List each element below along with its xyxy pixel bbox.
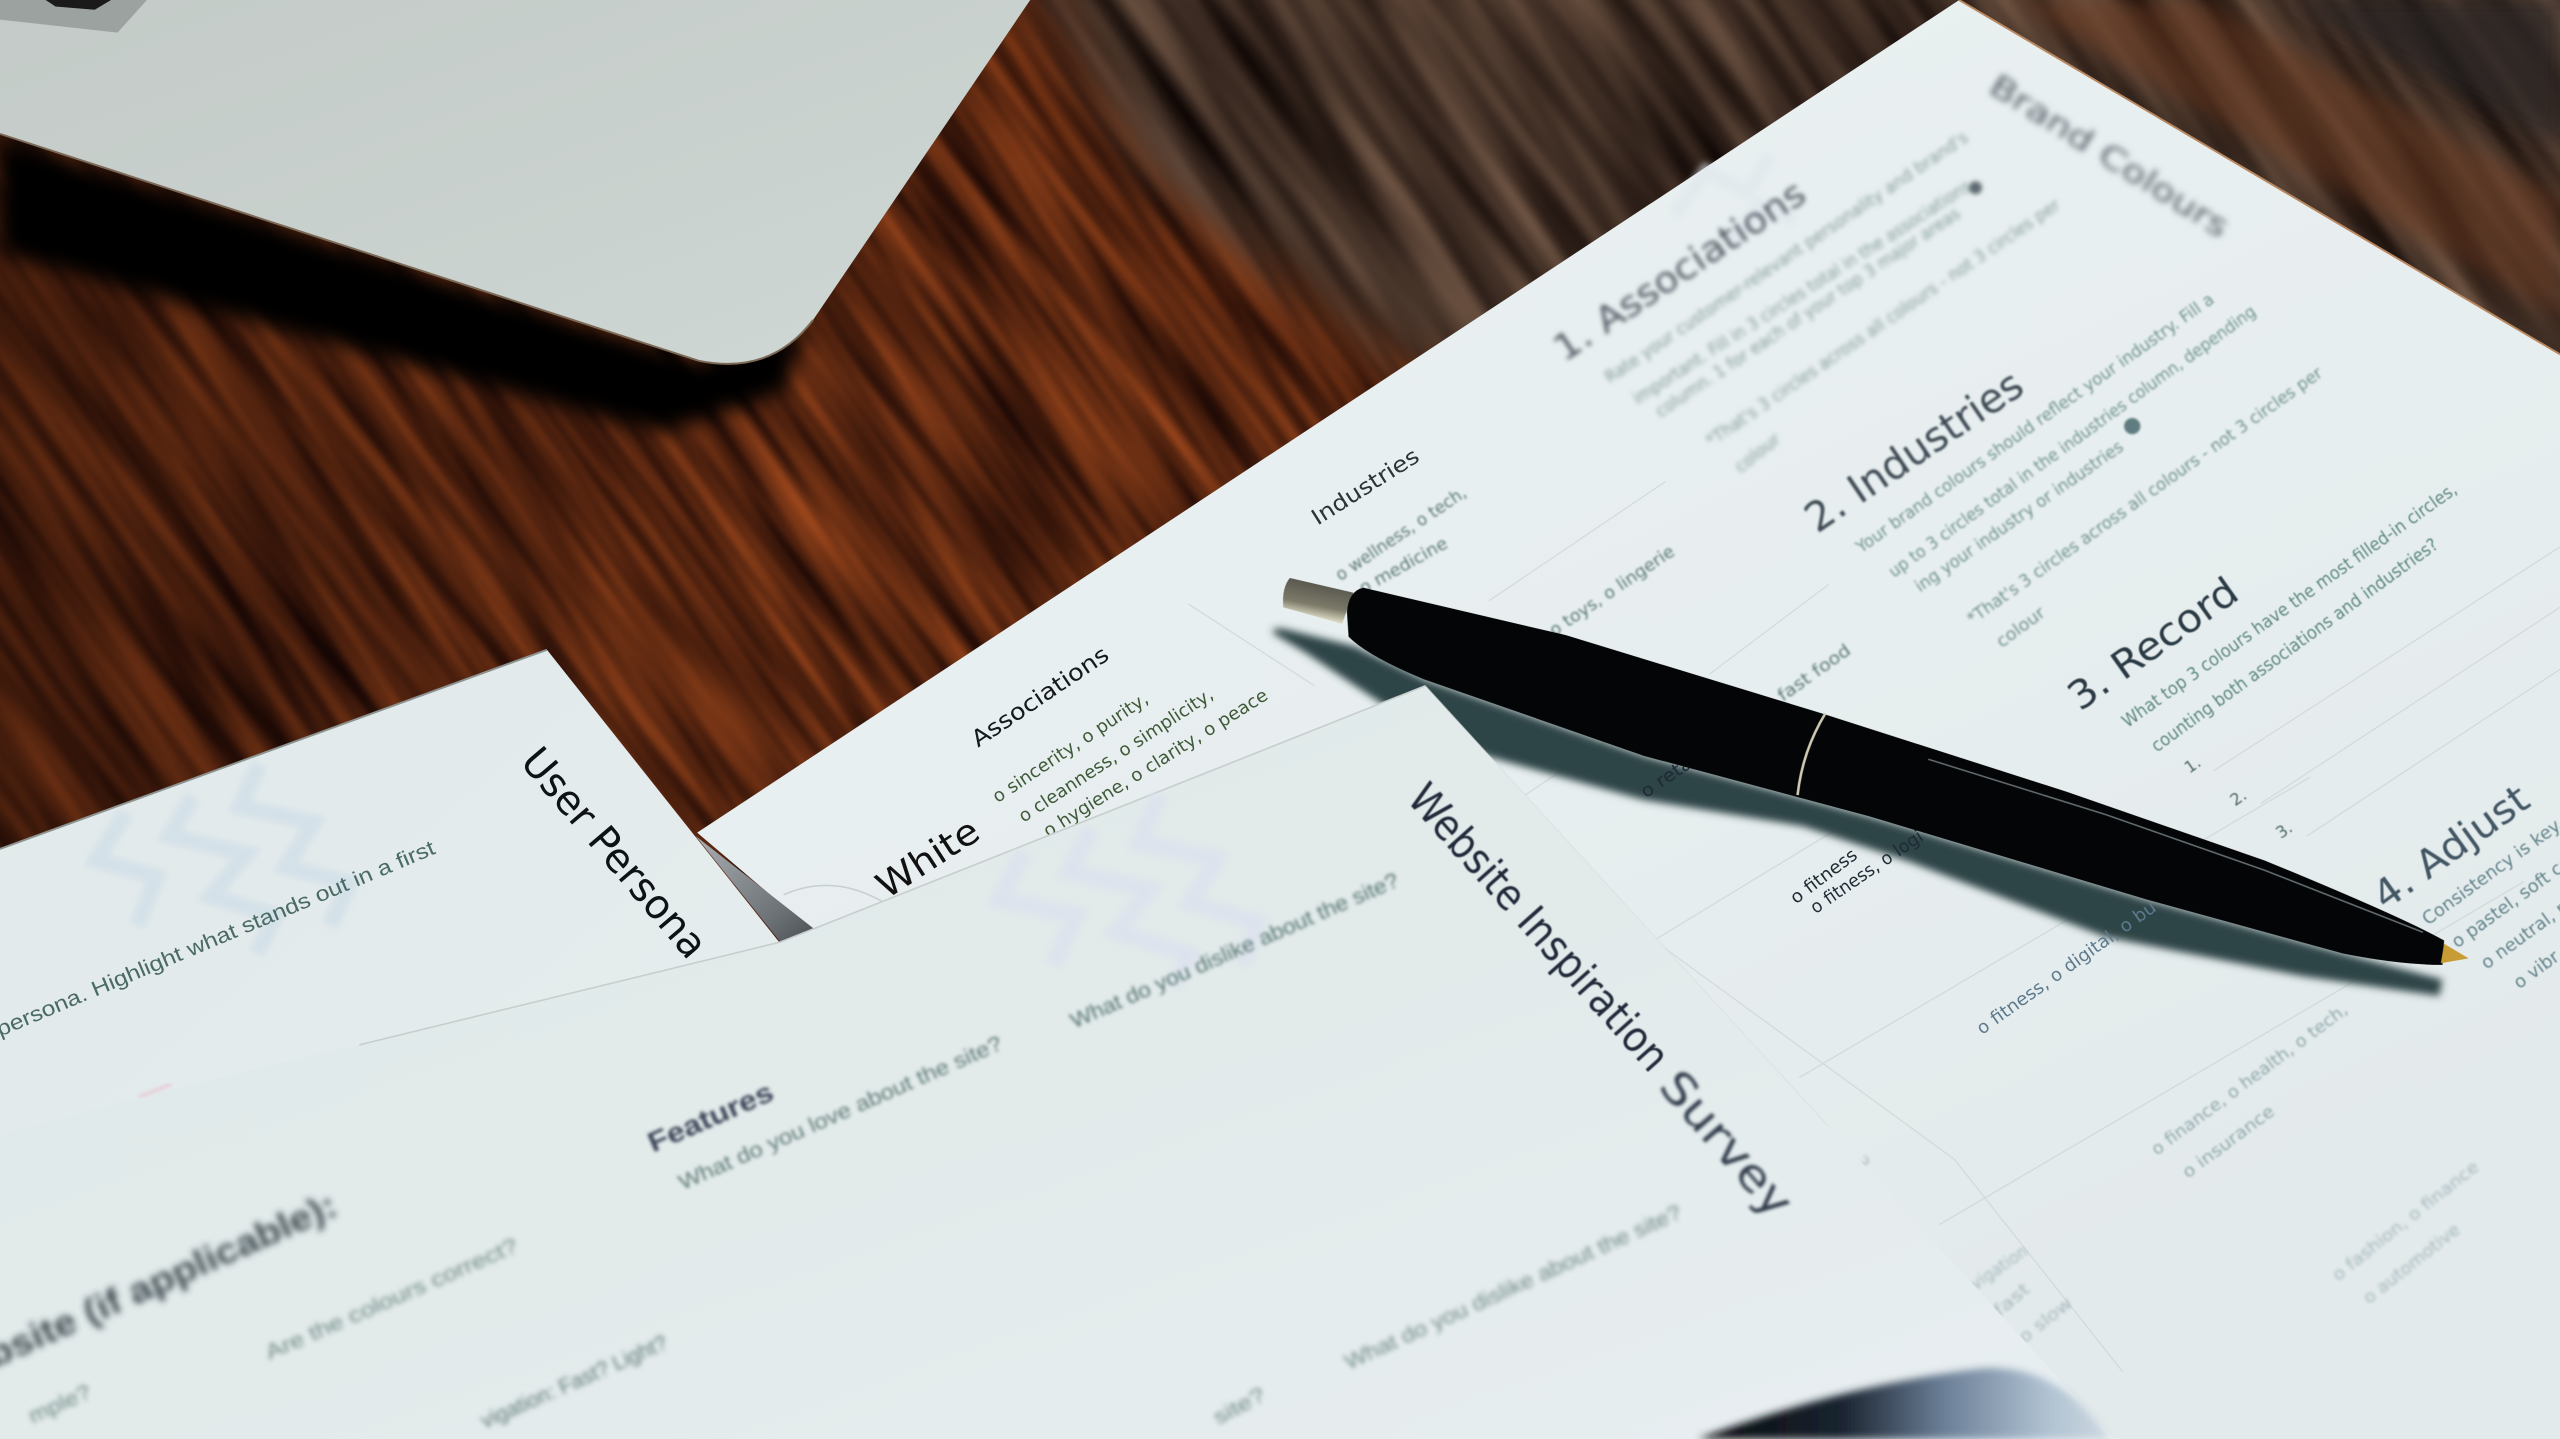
heading: Website Inspiration Survey [1398, 775, 1803, 1228]
panel: User Persona worksheet [0, 650, 780, 1306]
table: industries column: o fashion, o finance [2329, 1157, 2483, 1286]
text block: 1. Associations: 1. Associations [1546, 173, 1814, 370]
text block: 2. Industries: ing your industry or industries [1911, 437, 2128, 597]
text block: 3. Record: 3. [2272, 818, 2296, 842]
panel: Brand Colours worksheet [697, 0, 2560, 1439]
laptop hinge detail [0, 0, 147, 33]
text block: 1. Associations: *That's 3 circles across all colours - not 3 circles per [1703, 195, 2065, 451]
text block: 1. Associations [1546, 128, 2065, 477]
table: colour associations: o sincerity, o purity, [989, 688, 1152, 807]
heading: User Persona [512, 738, 717, 968]
table: industries column: o fitness, o logi [1806, 826, 1927, 918]
text block: 1. Associations: column. 1 for each of your top 3 major areas [1652, 204, 1964, 422]
survey questions: Are the colours correct? [262, 1234, 521, 1365]
text block: 2. Industries: 2. Industries [1796, 360, 2032, 542]
table: industries column: o wellness, o tech, [1332, 483, 1470, 585]
text block: 3. Record: What top 3 colours have the most filled-in circles, [2118, 479, 2461, 732]
table: colour associations: o hygiene, o clarity, o peace [1040, 685, 1272, 842]
panel: Website Inspiration Survey worksheet [0, 686, 2114, 1439]
table: colour associations: White [869, 810, 987, 907]
heading: Website Inspiration Survey: Survey [1649, 1061, 1803, 1228]
text block: 1. Associations: Rate your customer-relevant personality and brand's [1601, 128, 1972, 388]
survey questions: What do you dislike about the site? [1341, 1201, 1685, 1374]
wooden desk background [0, 0, 2560, 942]
table: colour associations: Associations [967, 642, 1114, 753]
survey questions: vigation: Fast? Light? [478, 1331, 671, 1433]
phone corner at bottom edge [1698, 1368, 2109, 1439]
text block: 2. Industries: colour [1993, 602, 2050, 652]
text block: 3. Record: 2. [2226, 785, 2250, 810]
survey questions: What do you love about the site? [675, 1032, 1006, 1195]
table: industries column: o fitness, o digital, o bu [1973, 897, 2160, 1039]
watermark [999, 795, 1257, 986]
pen shadow [1273, 628, 2442, 996]
heading: Website Inspiration Survey: Website Inspiration [1398, 775, 1678, 1082]
table: industries column: o toys, o lingerie [1546, 542, 1679, 641]
text block: 4. Adjust [2365, 777, 2560, 993]
table: industries column: o slow [2015, 1294, 2076, 1348]
table: industries column: o fitness [1786, 845, 1862, 908]
watermark [1673, 155, 1796, 245]
watermark [96, 764, 349, 953]
silver push button [1283, 578, 1353, 624]
table: industries column: Navigation [1949, 1242, 2032, 1307]
text block: 3. Record: 1. [2181, 753, 2204, 777]
laptop shadow [0, 139, 808, 433]
gold tip [2441, 944, 2469, 963]
table: industries column: o fast [1974, 1279, 2035, 1334]
survey questions: Features [643, 1076, 778, 1158]
text block: 1. Associations: important. Fill in 3 circles total in the associations [1629, 176, 1975, 409]
text block: 3. Record: 3. Record [2060, 569, 2247, 720]
silver ring [1798, 713, 1825, 795]
table: industries column: o finance, o health, o tech, [2148, 1000, 2352, 1160]
table: industries column: o insurance [2179, 1102, 2279, 1183]
table: colour associations [784, 642, 1272, 907]
table: industries column: 2. [1851, 1153, 1877, 1178]
survey questions: mple? [25, 1381, 95, 1428]
heading: Brand Colours: Brand Colours [1983, 68, 2235, 245]
survey questions: site? [1210, 1383, 1270, 1430]
pen [1283, 578, 2469, 965]
text block: 2. Industries [1796, 290, 2327, 652]
survey questions [0, 869, 1685, 1433]
table: industries column: o medicine [1356, 534, 1451, 599]
survey questions: What do you dislike about the site? [1067, 869, 1402, 1033]
table: industries column [1307, 444, 2483, 1348]
shadow gap between sheets [696, 836, 816, 942]
laptop corner [0, 0, 1030, 364]
table: industries column: o automotive [2360, 1220, 2464, 1308]
text block: 3. Record: counting both associations and industries? [2147, 534, 2442, 757]
text block: 2. Industries: up to 3 circles total in the industries column, depending [1885, 302, 2260, 582]
gloss highlight [1928, 759, 2423, 932]
text block: 2. Industries: *That's 3 circles across all colours - not 3 circles per [1964, 363, 2327, 629]
text block: 1. Associations: colour [1731, 429, 1785, 477]
text block: 2. Industries: Your brand colours should reflect your industry. Fill a [1852, 290, 2218, 558]
table: industries column: fast food [1774, 641, 1855, 706]
pen barrel [1347, 588, 2444, 965]
text block: 3. Record [2060, 479, 2461, 842]
table: industries column: Industries [1307, 444, 1424, 531]
table: colour associations: o cleanness, o simplicity, [1015, 684, 1217, 827]
instruction line: persona. Highlight what stands out in a first [0, 837, 439, 1041]
text block: 4. Adjust: 4. Adjust [2365, 777, 2538, 919]
table: industries column: 1. [1821, 1136, 1847, 1162]
table: industries column: o retail [1637, 747, 1705, 803]
